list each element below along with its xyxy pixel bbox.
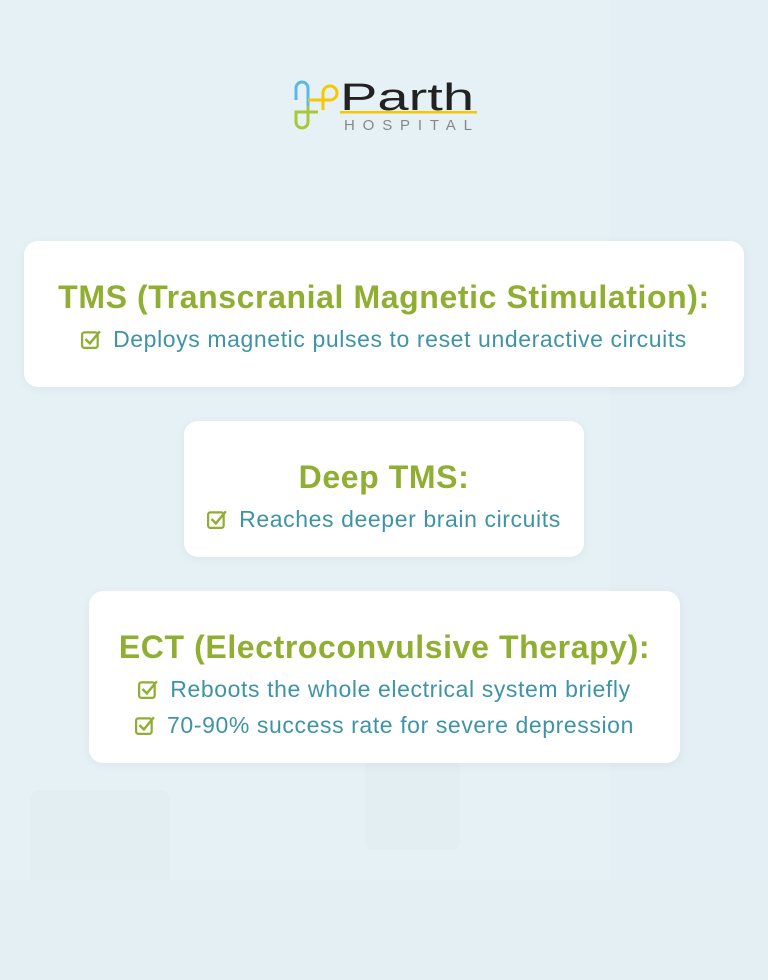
card: TMS [24,241,744,387]
bullet: TMS: Deploys magnetic pulses to reset underactive circuits [113,326,687,352]
bullet: ECT 2: 70-90% success rate for severe depression [167,712,634,738]
heading: TMS: TMS (Transcranial Magnetic Stimulation): [58,279,710,315]
logo [294,77,477,134]
logo: HOSPITAL [344,117,472,134]
bullet: ECT 1: Reboots the whole electrical system briefly [170,676,631,702]
bullet: Deep TMS: Reaches deeper brain circuits [239,506,561,532]
heading: ECT: ECT (Electroconvulsive Therapy): [119,629,650,665]
card: Deep TMS [184,421,584,557]
logo: Parth [340,77,474,119]
heading: Deep TMS: Deep TMS: [299,459,469,495]
card: ECT [89,591,680,763]
